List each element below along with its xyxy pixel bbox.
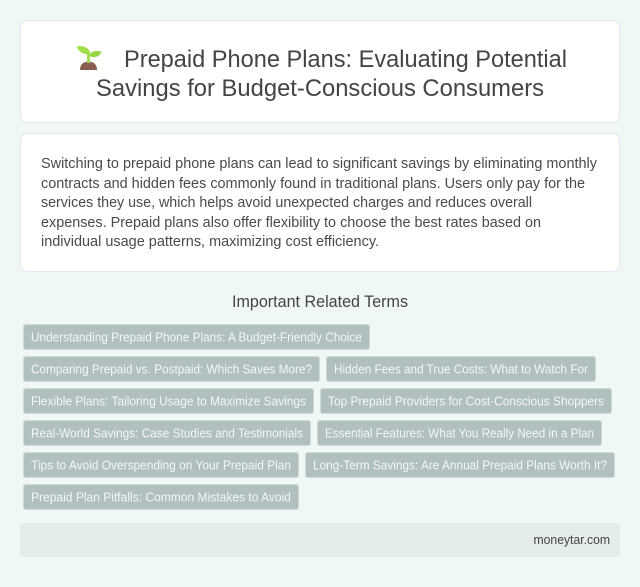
tag 7: Essential Features: What You Really Need in a Plan: [325, 426, 594, 440]
text block: summary: individual usage patterns, maximizing cost efficiency.: [41, 233, 379, 250]
text block: summary: services they use, which helps avoid unexpected charges and reduces overall: [41, 194, 532, 211]
tag 6: [24, 420, 310, 446]
heading: important related terms: Important Related Terms: [232, 293, 408, 311]
tag 3: Hidden Fees and True Costs: What to Watch For: [334, 362, 589, 376]
tag 3: [326, 356, 596, 382]
tag 1: Understanding Prepaid Phone Plans: A Budget-Friendly Choice: [31, 330, 362, 344]
tag 7: [318, 420, 602, 446]
heading: title text: Savings for Budget-Conscious Consumers: [96, 75, 544, 102]
panel: title: [20, 20, 620, 122]
icon: seedling: [76, 46, 102, 70]
tag 9: Long-Term Savings: Are Annual Prepaid Plans Worth It?: [313, 458, 607, 472]
text block: summary: [41, 155, 597, 250]
tag 6: Real-World Savings: Case Studies and Testimonials: [31, 426, 303, 440]
footer: site name: moneytar.com: [534, 532, 610, 547]
tag 10: [24, 484, 298, 510]
tag list: [24, 324, 614, 510]
tag 1: [24, 324, 370, 350]
text block: summary: contracts and hidden fees commonly found in traditional plans. Users only pay for the: [41, 175, 585, 192]
text block: summary: Switching to prepaid phone plans can lead to significant savings by eliminating monthly: [41, 155, 597, 172]
heading: title text: [96, 46, 567, 102]
tag 10: Prepaid Plan Pitfalls: Common Mistakes to Avoid: [31, 490, 291, 504]
tag 5: [320, 388, 612, 414]
footer bar: [20, 523, 620, 557]
tag 8: [24, 452, 298, 478]
tag 4: [24, 388, 314, 414]
heading: title text: Prepaid Phone Plans: Evaluating Potential: [124, 46, 567, 73]
tag 8: Tips to Avoid Overspending on Your Prepaid Plan: [31, 458, 291, 472]
panel: summary paragraph: [20, 134, 620, 272]
text block: summary: expenses. Prepaid plans also offer flexibility to choose the best rates based on: [41, 214, 541, 231]
tag 2: Comparing Prepaid vs. Postpaid: Which Saves More?: [31, 362, 312, 376]
tag 9: [306, 452, 614, 478]
tag 2: [24, 356, 320, 382]
tag 5: Top Prepaid Providers for Cost-Conscious Shoppers: [328, 394, 604, 408]
tag 4: Flexible Plans: Tailoring Usage to Maximize Savings: [31, 394, 306, 408]
